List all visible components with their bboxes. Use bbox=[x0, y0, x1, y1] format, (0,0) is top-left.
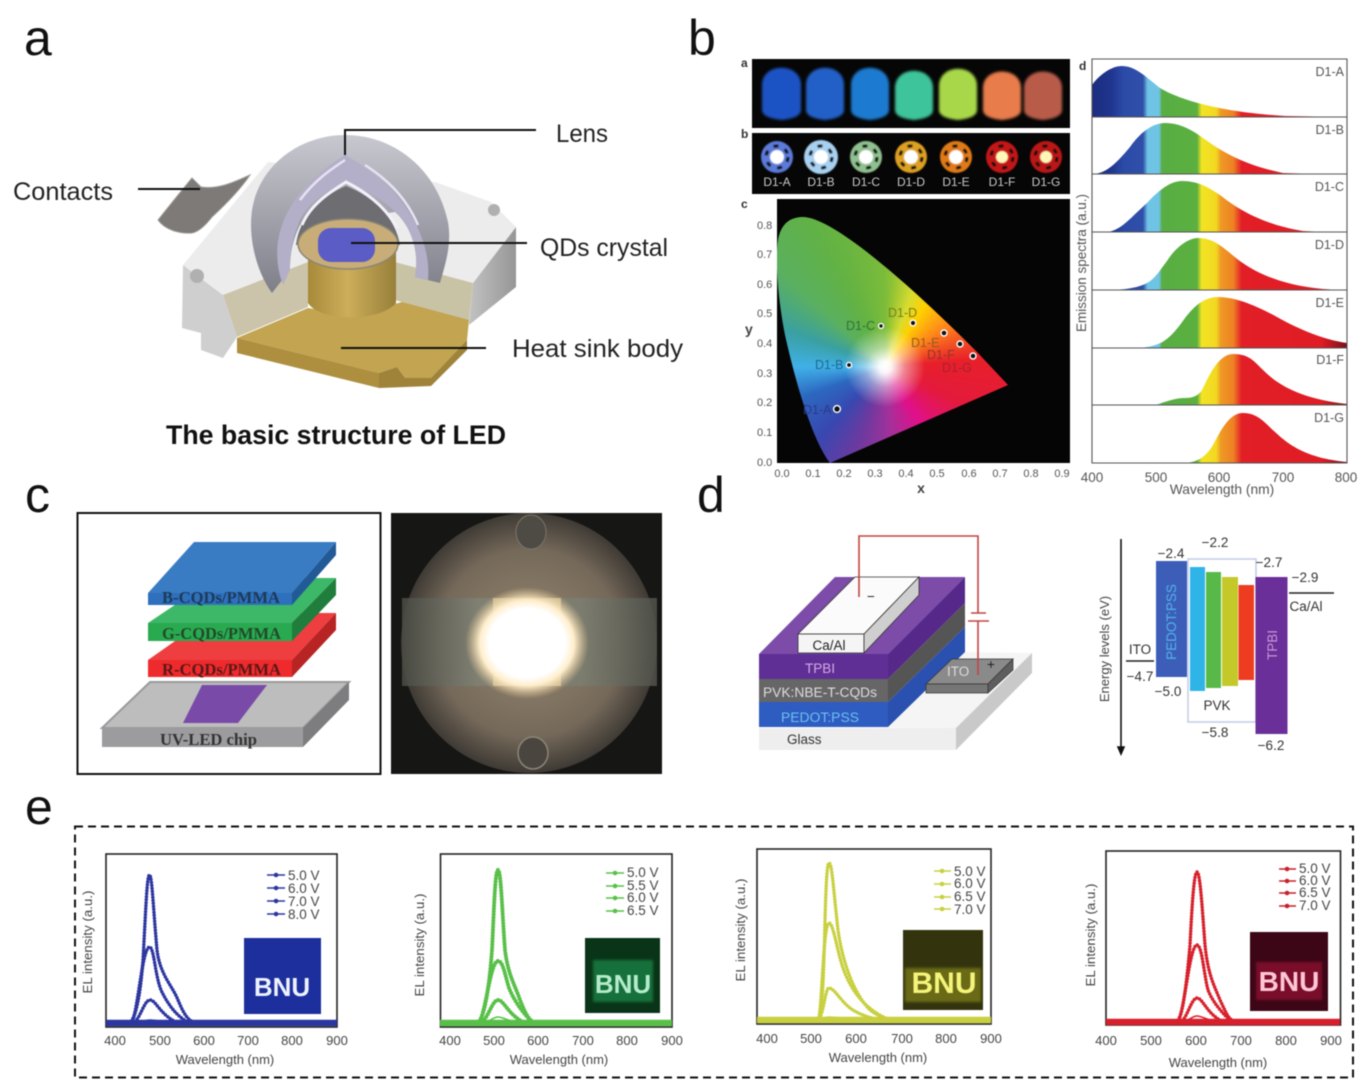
label: Heat sink body: Heat sink body bbox=[512, 335, 684, 363]
TPBI block: TPBI bbox=[1265, 630, 1280, 660]
chart: green EL spectra bbox=[412, 854, 683, 1067]
panel c: lit device photo bbox=[391, 513, 662, 774]
yellow axis labels: 600 bbox=[845, 1031, 867, 1046]
emitter bars bbox=[1190, 567, 1254, 691]
PVK box bbox=[1188, 559, 1256, 722]
label: Contacts: Contacts bbox=[13, 178, 113, 206]
yellow axis labels: EL intensity (a.u.) bbox=[733, 879, 748, 981]
CIE x axis: 0.7 bbox=[992, 468, 1008, 480]
energy values: −5.0 bbox=[1155, 684, 1181, 699]
green legend bbox=[606, 865, 659, 918]
CIE x axis: x bbox=[917, 480, 925, 496]
spectrum names: D1-E bbox=[1316, 296, 1344, 310]
energy values: −5.8 bbox=[1202, 725, 1228, 740]
inset: green BNU photo bbox=[585, 938, 660, 1013]
red legend: 6.0 V bbox=[1299, 873, 1331, 888]
red axis labels: 600 bbox=[1185, 1033, 1207, 1048]
energy values: PVK bbox=[1203, 698, 1231, 713]
marker labels: D1-F bbox=[927, 348, 955, 362]
chart: yellow EL spectra bbox=[733, 849, 1002, 1065]
marker labels: D1-A bbox=[803, 403, 832, 417]
sub label d: d bbox=[1079, 59, 1086, 73]
panel label b: b bbox=[688, 10, 716, 66]
marker labels: D1-B bbox=[815, 358, 843, 372]
panel b: photo row of lit LED domes bbox=[752, 59, 1070, 128]
LED housing bbox=[182, 162, 516, 358]
blue axis labels bbox=[80, 891, 348, 1067]
sub labels a b c: a bbox=[741, 56, 748, 70]
blue axis labels: 800 bbox=[281, 1033, 303, 1048]
yellow curves bbox=[757, 863, 991, 1020]
inset: red BNU photo: BNU bbox=[1259, 966, 1319, 997]
chromaticity markers bbox=[834, 320, 976, 412]
cylinder post bbox=[308, 244, 396, 317]
red axis labels: 700 bbox=[1230, 1033, 1252, 1048]
panel d: device stack bbox=[759, 536, 1032, 750]
blue layer bbox=[148, 542, 336, 607]
yellow axis labels: Wavelength (nm) bbox=[829, 1050, 927, 1065]
blue curves bbox=[106, 875, 337, 1023]
panel b: ring LED row: D1-D bbox=[897, 175, 925, 189]
CIE y axis: 0.5 bbox=[757, 308, 772, 320]
blue axis labels: Wavelength (nm) bbox=[176, 1052, 274, 1067]
label: QDs crystal: QDs crystal bbox=[540, 234, 668, 262]
chart: blue EL spectra bbox=[80, 854, 348, 1067]
energy values: −4.7 bbox=[1127, 669, 1153, 684]
spectra x tick labels: 600 bbox=[1208, 470, 1230, 485]
spectra x tick labels: 800 bbox=[1335, 470, 1357, 485]
green axis labels: 500 bbox=[483, 1033, 505, 1048]
red layer: R-CQDs/PMMA bbox=[162, 660, 282, 679]
red curves bbox=[1106, 872, 1340, 1022]
panel b: CIE chromaticity diagram bbox=[777, 199, 1070, 463]
green legend: 6.5 V bbox=[627, 903, 659, 918]
energy values: −2.2 bbox=[1202, 535, 1228, 550]
QDs crystal bbox=[318, 228, 375, 262]
green axis labels: EL intensity (a.u.) bbox=[412, 894, 427, 996]
blue legend bbox=[267, 868, 320, 922]
axis title: Energy levels (eV) bbox=[1097, 596, 1112, 702]
yellow axis labels: 400 bbox=[756, 1031, 778, 1046]
icon: contact lead bbox=[158, 175, 250, 233]
spectra x tick labels: 500 bbox=[1145, 470, 1167, 485]
inset: green BNU photo: BNU bbox=[595, 969, 651, 999]
red axis labels: 900 bbox=[1320, 1033, 1342, 1048]
blue legend: 7.0 V bbox=[288, 894, 320, 909]
post top bbox=[298, 219, 398, 269]
layer labels: ITO bbox=[947, 664, 969, 679]
energy values: Ca/Al bbox=[1289, 599, 1323, 614]
green axis labels bbox=[412, 894, 683, 1067]
inset: blue BNU photo bbox=[244, 938, 321, 1014]
CIE y axis: 0.0 bbox=[757, 457, 772, 469]
CIE x axis: 0.3 bbox=[867, 468, 883, 480]
spectrum fills bbox=[1092, 66, 1347, 463]
layer labels: PVK:NBE-T-CQDs bbox=[763, 685, 877, 700]
CIE x axis: 0.9 bbox=[1054, 468, 1070, 480]
yellow axis labels: 900 bbox=[980, 1031, 1002, 1046]
green legend: 5.0 V bbox=[627, 865, 659, 880]
red legend bbox=[1279, 861, 1331, 913]
CIE y axis: 0.4 bbox=[757, 338, 772, 350]
marker labels: D1-E bbox=[911, 336, 939, 350]
green legend: 5.5 V bbox=[627, 878, 659, 893]
green legend: 6.0 V bbox=[627, 890, 659, 905]
green axis labels: 400 bbox=[439, 1033, 461, 1048]
yellow legend: 6.5 V bbox=[954, 889, 986, 904]
panel label a: a bbox=[24, 10, 52, 66]
marker labels: D1-C bbox=[846, 319, 875, 333]
panel b: ring LED row: D1-G bbox=[1032, 175, 1060, 189]
spectrum names: D1-C bbox=[1315, 180, 1344, 194]
CIE y axis: 0.8 bbox=[757, 220, 772, 232]
spectra x title: Wavelength (nm) bbox=[1170, 482, 1274, 497]
CIE y axis: 0.6 bbox=[757, 279, 772, 291]
heat sink base bbox=[237, 302, 469, 388]
panel label d: d bbox=[697, 467, 725, 523]
CIE x axis: 0.5 bbox=[929, 468, 945, 480]
layer labels: PEDOT:PSS bbox=[781, 710, 859, 725]
energy axis arrow bbox=[1118, 539, 1124, 754]
blue layer: B-CQDs/PMMA bbox=[162, 588, 281, 607]
yellow legend: 7.0 V bbox=[954, 902, 986, 917]
panel b: ring LED row bbox=[752, 133, 1070, 194]
energy values: −2.9 bbox=[1292, 570, 1318, 585]
green axis labels: 600 bbox=[527, 1033, 549, 1048]
red legend: 5.0 V bbox=[1299, 861, 1331, 876]
yellow axis labels bbox=[733, 879, 1002, 1065]
red axis labels: 500 bbox=[1140, 1033, 1162, 1048]
energy values: −2.7 bbox=[1256, 555, 1282, 570]
spectra x tick labels bbox=[1081, 470, 1357, 485]
blue axis labels: EL intensity (a.u.) bbox=[80, 891, 95, 993]
PEDOT:PSS block bbox=[1156, 561, 1187, 677]
layer labels: TPBI bbox=[805, 661, 835, 676]
green axis labels: Wavelength (nm) bbox=[510, 1052, 608, 1067]
blue axis labels: 700 bbox=[237, 1033, 259, 1048]
panel b: ring LED row: D1-C bbox=[852, 175, 880, 189]
CIE x axis bbox=[774, 468, 1070, 496]
device layers bbox=[759, 577, 965, 727]
CIE y axis bbox=[745, 220, 772, 469]
CIE x axis: 0.0 bbox=[774, 468, 790, 480]
marker labels: D1-D bbox=[888, 306, 917, 320]
CIE y axis: 0.1 bbox=[757, 427, 772, 439]
blue legend: 6.0 V bbox=[288, 881, 320, 896]
yellow axis labels: 500 bbox=[800, 1031, 822, 1046]
leader lines bbox=[138, 130, 536, 348]
blue axis labels: 500 bbox=[149, 1033, 171, 1048]
electrode lines bbox=[1126, 593, 1334, 661]
spectrum names bbox=[1314, 65, 1345, 425]
CIE y axis: y bbox=[745, 321, 753, 337]
marker labels bbox=[803, 306, 972, 417]
energy values: −6.2 bbox=[1258, 738, 1284, 753]
inset: blue BNU photo: BNU bbox=[254, 972, 310, 1002]
spectrum names: D1-B bbox=[1316, 123, 1344, 137]
green layer bbox=[148, 578, 336, 643]
UV-LED chip layer: UV-LED chip bbox=[160, 730, 257, 749]
CIE y axis: 0.7 bbox=[757, 249, 772, 261]
green axis labels: 700 bbox=[572, 1033, 594, 1048]
Ca/Al electrode bbox=[798, 577, 919, 653]
layer labels: + bbox=[987, 657, 995, 672]
red legend: 6.5 V bbox=[1299, 885, 1331, 900]
yellow legend: 5.0 V bbox=[954, 864, 986, 879]
CIE x axis: 0.8 bbox=[1023, 468, 1039, 480]
red axis labels bbox=[1083, 884, 1342, 1070]
red axis labels: Wavelength (nm) bbox=[1169, 1055, 1267, 1070]
PEDOT:PSS block: PEDOT:PSS bbox=[1164, 584, 1179, 660]
green layer: G-CQDs/PMMA bbox=[162, 624, 282, 643]
energy values bbox=[1127, 535, 1323, 753]
panel b: ring LED row: D1-B bbox=[807, 175, 835, 189]
red layer bbox=[148, 613, 336, 679]
layer labels: Glass bbox=[787, 732, 822, 747]
panel d: energy level diagram bbox=[1097, 535, 1334, 754]
spectrum names: D1-F bbox=[1316, 353, 1344, 367]
spectra x tick labels: 400 bbox=[1081, 470, 1103, 485]
inset: yellow BNU photo bbox=[903, 930, 983, 1010]
panel a: LED structure bbox=[158, 135, 516, 388]
caption: The basic structure of LED bbox=[166, 420, 506, 450]
UV-LED chip layer bbox=[102, 682, 349, 749]
blue legend: 8.0 V bbox=[288, 907, 320, 922]
inset: red BNU photo bbox=[1250, 932, 1328, 1011]
panel b: ring LED row: D1-F bbox=[989, 175, 1015, 189]
panel c: layered device schematic bbox=[78, 513, 380, 774]
spectrum names: D1-D bbox=[1315, 238, 1344, 252]
spectra y title: Emission spectra (a.u.) bbox=[1074, 194, 1089, 332]
yellow axis labels: 800 bbox=[935, 1031, 957, 1046]
blue axis labels: 900 bbox=[326, 1033, 348, 1048]
sub labels a b c: b bbox=[741, 127, 748, 141]
yellow legend bbox=[934, 864, 986, 917]
sub labels a b c: c bbox=[741, 197, 748, 211]
green curves bbox=[440, 870, 672, 1023]
panel label e: e bbox=[25, 779, 53, 835]
chart: red EL spectra bbox=[1083, 851, 1342, 1070]
blue legend: 5.0 V bbox=[288, 868, 320, 883]
red axis labels: EL intensity (a.u.) bbox=[1083, 884, 1098, 986]
CIE y axis: 0.3 bbox=[757, 368, 772, 380]
CIE x axis: 0.6 bbox=[961, 468, 977, 480]
CIE y axis: 0.2 bbox=[757, 397, 772, 409]
energy values: ITO bbox=[1129, 642, 1151, 657]
circuit wire and battery bbox=[859, 536, 989, 675]
inset: yellow BNU photo: BNU bbox=[912, 967, 976, 1000]
yellow legend: 6.0 V bbox=[954, 876, 986, 891]
label: Lens: Lens bbox=[556, 120, 608, 148]
spectra x tick labels: 700 bbox=[1272, 470, 1294, 485]
red legend: 7.0 V bbox=[1299, 898, 1331, 913]
TPBI block bbox=[1256, 577, 1288, 734]
layer labels bbox=[763, 589, 995, 747]
blue axis labels: 600 bbox=[193, 1033, 215, 1048]
blue axis labels: 400 bbox=[104, 1033, 126, 1048]
green axis labels: 900 bbox=[661, 1033, 683, 1048]
sub labels a b c bbox=[741, 56, 748, 211]
red axis labels: 800 bbox=[1275, 1033, 1297, 1048]
layer labels: Ca/Al bbox=[812, 638, 846, 653]
red axis labels: 400 bbox=[1095, 1033, 1117, 1048]
glass substrate bbox=[759, 652, 1032, 750]
panel e: dashed container bbox=[75, 826, 1353, 1078]
CIE x axis: 0.2 bbox=[836, 468, 852, 480]
energy values: −2.4 bbox=[1158, 546, 1185, 561]
lens dome bbox=[251, 135, 449, 293]
panel b: ring LED row: D1-A bbox=[763, 175, 791, 189]
spectrum names: D1-A bbox=[1316, 65, 1345, 79]
yellow axis labels: 700 bbox=[891, 1031, 913, 1046]
panel b: ring LED row: D1-E bbox=[942, 175, 970, 189]
green axis labels: 800 bbox=[616, 1033, 638, 1048]
marker labels: D1-G bbox=[942, 361, 972, 375]
CIE x axis: 0.4 bbox=[898, 468, 914, 480]
ITO contact bbox=[926, 659, 1013, 693]
panel label c: c bbox=[25, 467, 50, 523]
spectrum names: D1-G bbox=[1314, 411, 1344, 425]
CIE x axis: 0.1 bbox=[805, 468, 821, 480]
layer labels: − bbox=[867, 589, 875, 604]
panel b: emission spectra bbox=[1074, 59, 1357, 497]
